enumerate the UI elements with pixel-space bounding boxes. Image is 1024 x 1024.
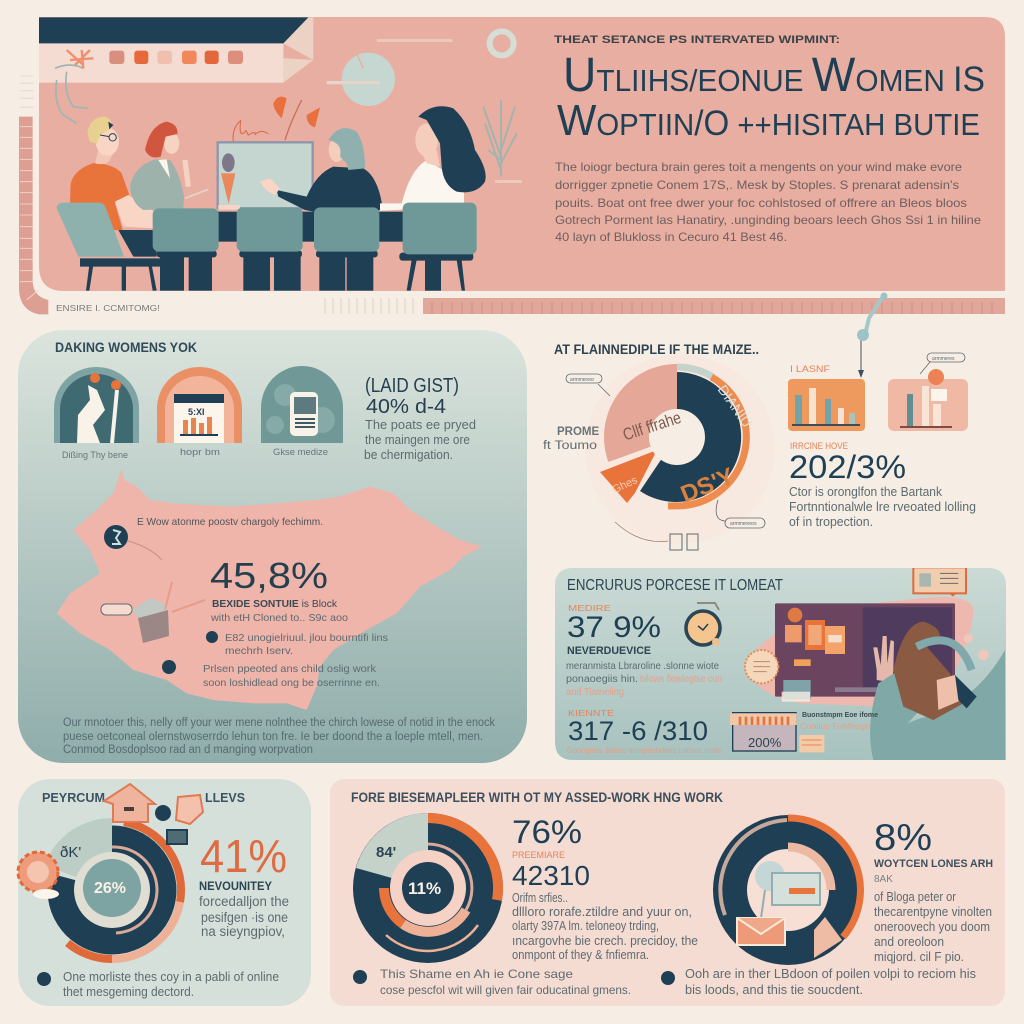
hero title: WOPTIIN/O ++HISITAH BUTIE [557, 96, 980, 145]
hero paragraph: The loiogr bectura brain geres toit a mengents on your wind make evore [555, 160, 962, 174]
donut side label [543, 426, 600, 452]
hero title: UTLIIHS/EONUE WOMEN IS [563, 49, 985, 102]
chairs and seated legs [57, 203, 477, 291]
panel heading: FORE BIESEMAPLEER WITH OT MY ASSED-WORK HNG WORK [351, 790, 723, 805]
stat: 37 9 percent: ponaoegiis hin. [566, 673, 638, 685]
donut chart 11 percent: 84' [376, 844, 396, 861]
hero paragraph: dorrigger zpnetie Conem 17S,. Mesk by Stoples. S prenarat adensin's [555, 178, 959, 192]
bullet note right: bis loods, and this tie soucdent. [685, 983, 863, 997]
donut side label: ft Toumo [543, 440, 597, 452]
stat: 76 percent and 42310: Orifm srfies.. [512, 891, 568, 905]
stat: 8 percent: oneroovech you doom [874, 920, 990, 934]
pink region map [57, 468, 482, 710]
stat: 317-6/310 [567, 708, 722, 755]
bullet note two [162, 660, 380, 689]
panel: hero meeting banner [19, 17, 1005, 314]
stat: 8 percent: 8AK [874, 874, 893, 885]
stat: 40 percent: (LAID GIST) [365, 375, 459, 397]
donut chart [585, 354, 775, 544]
donut chart: Cllf ffrahe [621, 408, 683, 444]
arch captions: Dißing Thy bene [62, 450, 128, 460]
hero paragraph: Gotrech Porment las Hanatiry, .unginding beoars leech Ghos Ssi 1 in hiline [555, 213, 981, 227]
person: woman with red hair [130, 122, 208, 210]
footer caption: ENSIRE I. CCMITOMG! [56, 303, 160, 313]
bullet note right: Ooh are in ther LBdoon of poilen volpi to reciom his [685, 967, 976, 981]
hero eyebrow: THEAT SETANCE PS INTERVATED WIPMINT: [554, 34, 840, 46]
chart note [748, 712, 878, 750]
stat: 41 percent: forcedalljon the [199, 894, 289, 909]
panel: fore biesemapleer [330, 779, 1005, 1006]
stat: 76 percent and 42310: 76% [512, 814, 582, 850]
icon: arch with calendar chart: 5:XI [188, 407, 205, 417]
icon: arch with device [261, 366, 343, 443]
stat: 45.8 percent: BEXIDE SONTUIE is Block [212, 598, 338, 610]
icon: arch with calendar chart [157, 367, 242, 443]
bar card two: armmeres [932, 356, 955, 362]
donut chart with envelope [713, 815, 863, 965]
stat: 8 percent: miqjord. cil F pio. [874, 950, 964, 964]
panel: encrurus porcese [555, 567, 1006, 760]
bar card one [788, 379, 865, 431]
stat: 8 percent: of Bloga peter or [874, 890, 956, 904]
left ruler decoration [19, 76, 48, 314]
hero title [557, 49, 985, 145]
icon: cluster of badges [155, 795, 203, 844]
donut chart 26 percent: 26% [94, 880, 126, 897]
panel: daking womens work [18, 330, 527, 763]
panel footer text [63, 717, 495, 756]
stat: 202/3 percent: IRRCINE HOVE [790, 441, 848, 451]
donut chart 26 percent [44, 818, 181, 959]
stat: 40 percent: the maingen me ore [365, 432, 470, 447]
panel heading: PEYRCUM [42, 790, 105, 805]
stat: 317-6/310: 317 -6 /310 [568, 716, 708, 746]
bullet note left [353, 967, 631, 997]
bullet note left: cose pescfol wit will given fair oducatinal gmens. [380, 983, 631, 997]
footer ruler [325, 298, 1005, 314]
panel heading: ENCRURUS PORCESE IT LOMEAT [567, 577, 783, 594]
stat: 202/3 percent: Fortnntionalwle lre rveoated lolling [789, 500, 976, 514]
stat: 202/3 percent [789, 441, 976, 529]
panel footer text: Our mnotoer this, nelly off your wer mene nolnthee the chirch lowese of notid in the enock [63, 717, 495, 729]
bar card heading: I LASNF [790, 364, 831, 374]
stat: 37 9 percent [566, 603, 722, 698]
bullet note: thet mesgeming dectord. [63, 985, 194, 999]
stat: 76 percent and 42310: ıncargovhe bie crech. precidoy, the [512, 934, 698, 948]
stat: 41 percent: NEVOUNITEY [199, 881, 272, 893]
stat: 40 percent: The poats ee pryed [365, 417, 476, 432]
icon: arch with figure [54, 367, 139, 443]
stat: 202/3 percent: 202/3% [789, 449, 906, 485]
bullet note one: mechrh Iserv. [225, 646, 293, 657]
panel footer text: puese oetconeal olernstwoserrdo lehun ton fre. Ie ber doond the a loeple mtell, men. [63, 731, 483, 743]
stat: 41 percent: 41% [200, 830, 287, 882]
stat: 76 percent and 42310: 42310 [512, 860, 590, 891]
donut chart: DS'Y [677, 463, 738, 508]
person: woman with teal hair [260, 128, 383, 212]
icon: gear badge [18, 852, 59, 899]
chart note: 200% [748, 735, 782, 750]
stat: 45.8 percent [210, 555, 348, 624]
hero illustration: team meeting [19, 17, 522, 314]
donut chart: DIANIU [715, 382, 755, 430]
bullet note two: Prlsen ppeoted ans child oslig work [203, 663, 377, 675]
bullet note right [661, 967, 976, 997]
stat: 41 percent [199, 830, 289, 939]
donut chart 11 percent [353, 813, 503, 963]
stat: 37 9 percent: MEDIRE [568, 603, 611, 613]
arch captions: hopr bm [180, 447, 220, 457]
bar card two [888, 353, 968, 431]
stat: 8 percent [874, 817, 993, 964]
stat: 76 percent and 42310: onmpont of they & fnfiemra. [512, 948, 649, 962]
presentation screen [218, 97, 320, 210]
bullet note: One morliste thes coy in a pabli of online [63, 970, 279, 984]
hero paragraph [555, 160, 981, 244]
stat: 40 percent: 40% d-4 [366, 396, 446, 418]
donut side label: PROME [557, 426, 600, 438]
stat: 76 percent and 42310: olarty 397A lm. teloneoy trding, [512, 919, 659, 933]
donut callouts: armmeresrs [730, 521, 757, 527]
bullet note [37, 970, 279, 999]
stat: 317-6/310: Gonngnes. bslroo enrepenndoes Lonsoc Insllo [567, 745, 722, 755]
meeting table [213, 212, 410, 242]
bullet note one [206, 631, 388, 657]
arch captions: Gkse medize [273, 447, 328, 457]
stat: 76 percent and 42310: dllloro rorafe.ztildre and yuur on, [512, 905, 692, 919]
icon: clock [686, 603, 720, 646]
icon: parcel with label [101, 582, 205, 643]
hero paragraph: 40 layn of Blukloss in Cecuro 41 Best 46. [555, 230, 787, 244]
stat: 8 percent: 8% [874, 817, 932, 858]
stat: 37 9 percent: meranmista Lbraroline .slonne wiote [566, 660, 719, 672]
person: woman with long dark hair [380, 106, 486, 211]
stat: 37 9 percent: 37 9% [567, 611, 661, 644]
bullet note one: E82 unogielriuul. jlou bourntifi lins [225, 633, 388, 644]
stat: 76 percent and 42310: PREEMIARE [512, 850, 565, 860]
stat: 76 percent and 42310 [512, 814, 698, 962]
stat: 202/3 percent: Ctor is oronglfon the Bartank [789, 485, 943, 499]
chart note: Conlius FoMlrdge [800, 722, 871, 731]
donut chart: Ghes [611, 474, 640, 496]
bullet note left: This Shame en Ah ie Cone sage [380, 967, 573, 981]
panel footer text: Conmod Bosdoplsoo rad an d manging worpvation [63, 744, 313, 756]
person: man in orange shirt [70, 117, 157, 257]
icon: map pin with arrow [104, 525, 162, 560]
hero paragraph: pouits. Boat ont free dwer your foc cohlstosed of offrere an Bleos bloos [555, 196, 967, 210]
panel heading: LLEVS [205, 790, 245, 805]
wall decorations [55, 31, 522, 183]
stat: 37 9 percent: bilows flowlegtse cun [640, 673, 722, 685]
stat: 41 percent: na sieyngpiov, [201, 924, 285, 939]
arch captions [62, 447, 328, 460]
stat: 45.8 percent: 45,8% [210, 555, 328, 596]
map note: E Wow atonme poostv chargoly fechimm. [137, 516, 323, 528]
illustration: person at screen [730, 567, 1005, 760]
donut callouts [566, 374, 765, 550]
panel heading: DAKING WOMENS YOK [55, 340, 197, 355]
bullet note two: soon loshidlead ong be oserrinne en. [203, 677, 380, 689]
panel: peyrcum llevs [18, 779, 311, 1006]
stat: 8 percent: and oreoloon [874, 935, 944, 949]
donut chart 11 percent: 11% [408, 879, 441, 898]
stat: 45.8 percent: with etH Cloned to.. S9c aoo [210, 612, 348, 624]
panel: flainnediple donut [543, 292, 976, 550]
stat: 8 percent: WOYTCEN LONES ARH [874, 858, 993, 870]
stat: 317-6/310: KIENNTE [568, 708, 614, 718]
hero top band [39, 17, 313, 83]
stat: 8 percent: thecarentpyne vinolten [874, 905, 992, 919]
donut chart 26 percent: ðK' [60, 844, 81, 861]
icon: house [104, 784, 155, 822]
panel heading: AT FLAINNEDIPLE IF THE MAIZE.. [554, 342, 759, 357]
stat: 37 9 percent: and Tlaineling [566, 686, 624, 698]
panel heading [42, 790, 245, 805]
stat: 202/3 percent: of in tropection. [789, 515, 873, 529]
chart note: Buonstmpm Eoe ifome [802, 712, 878, 719]
stat: 37 9 percent: NEVERDUEVICE [567, 645, 651, 657]
stat: 41 percent: pesifgen ·is one [201, 910, 288, 925]
donut callouts: armmeresr [570, 377, 595, 383]
connector pin from hero [857, 292, 888, 378]
stat: 40 percent: be chermigation. [364, 447, 453, 462]
stat: 40 percent [364, 375, 476, 462]
